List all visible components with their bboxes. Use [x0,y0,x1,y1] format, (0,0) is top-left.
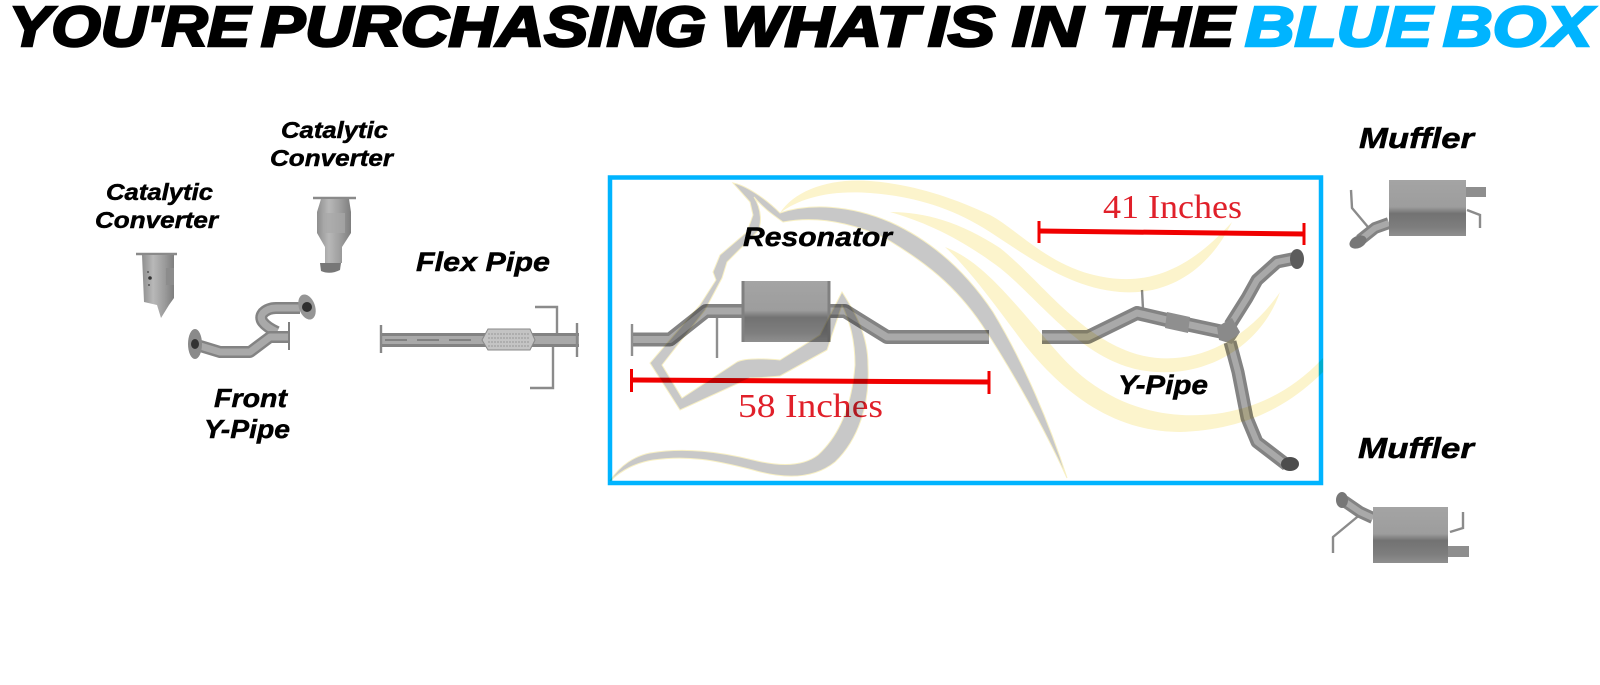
label: catalytic converter left: Converter [95,207,219,233]
label: Y-pipe: Y-Pipe [1118,370,1208,400]
label: catalytic converter upper: Converter [270,145,394,171]
part: catalytic converter left [136,254,177,318]
title [9,0,1596,59]
label: catalytic converter upper [270,117,394,171]
label: front Y-pipe: Y-Pipe [204,414,290,444]
label: muffler bottom: Muffler [1358,433,1476,465]
dimension: 58 inches: 58 Inches [738,388,883,425]
part: flex pipe [381,307,579,388]
label: resonator: Resonator [743,222,894,252]
part: front Y-pipe [188,292,319,359]
label: flex pipe: Flex Pipe [416,247,550,277]
label: front Y-pipe [204,383,290,444]
part: resonator pipe [632,281,989,358]
dimension: 41 inches [1039,189,1304,245]
label: catalytic converter left: Catalytic [106,179,213,205]
part: muffler bottom [1333,492,1469,563]
dimension: 41 inches: 41 Inches [1103,189,1242,226]
watermark: horse head logo [610,181,1323,481]
label: muffler top: Muffler [1359,123,1476,155]
part: Y-pipe [1042,249,1304,471]
part: catalytic converter upper [313,198,356,273]
part: muffler top [1347,180,1486,251]
panel: blue box [610,178,1321,483]
label: catalytic converter upper: Catalytic [281,117,388,143]
label: front Y-pipe: Front [214,383,288,413]
label: catalytic converter left [95,179,219,233]
dimension: 58 inches [631,369,989,425]
